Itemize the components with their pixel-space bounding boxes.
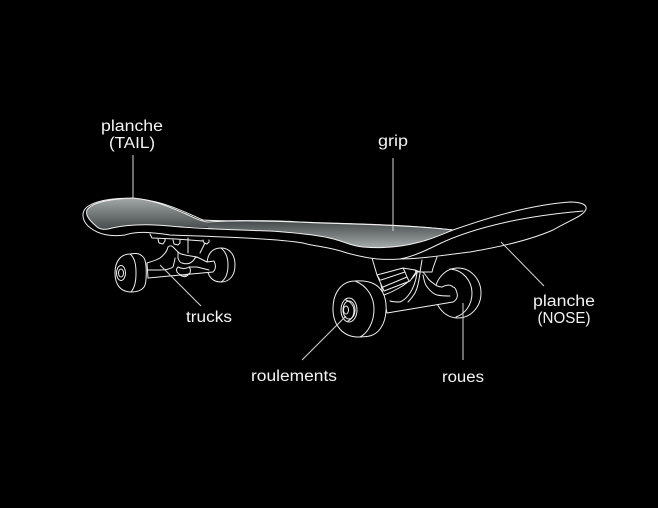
front bushing bbox=[377, 268, 416, 291]
rear truck hanger bbox=[147, 238, 215, 278]
rear right wheel bbox=[207, 248, 235, 282]
pointer: planche nose bbox=[501, 242, 544, 286]
grip tail bbox=[87, 198, 260, 230]
label: planche nose: planche bbox=[533, 293, 595, 310]
grip centre bbox=[208, 221, 453, 248]
deck body bbox=[83, 198, 586, 259]
pointer: roues bbox=[462, 303, 464, 360]
pointer: roulements bbox=[302, 316, 346, 360]
pointer: grip bbox=[392, 158, 394, 231]
rear truck and wheels bbox=[115, 234, 235, 292]
label: roulements: roulements bbox=[251, 368, 337, 385]
label: nose: (NOSE) bbox=[538, 310, 590, 327]
pointer: trucks bbox=[160, 265, 201, 306]
front right wheel bbox=[435, 268, 481, 318]
label: roues: roues bbox=[442, 369, 484, 386]
deck edge lines bbox=[87, 198, 453, 230]
front truck and wheels bbox=[333, 257, 481, 337]
front truck hanger bbox=[380, 271, 457, 313]
label: planche tail: planche bbox=[101, 118, 163, 135]
label: trucks: trucks bbox=[186, 309, 232, 326]
label: tail: (TAIL) bbox=[109, 135, 155, 152]
rear bolts bbox=[158, 239, 209, 245]
deck bbox=[83, 198, 586, 259]
rear baseplate bbox=[150, 234, 203, 241]
label: grip: grip bbox=[378, 133, 408, 150]
front left wheel bbox=[333, 281, 386, 337]
front bushing ribs bbox=[381, 268, 409, 287]
front baseplate bbox=[372, 257, 437, 280]
pointer: planche tail bbox=[132, 155, 134, 198]
rear left wheel bbox=[115, 253, 146, 292]
